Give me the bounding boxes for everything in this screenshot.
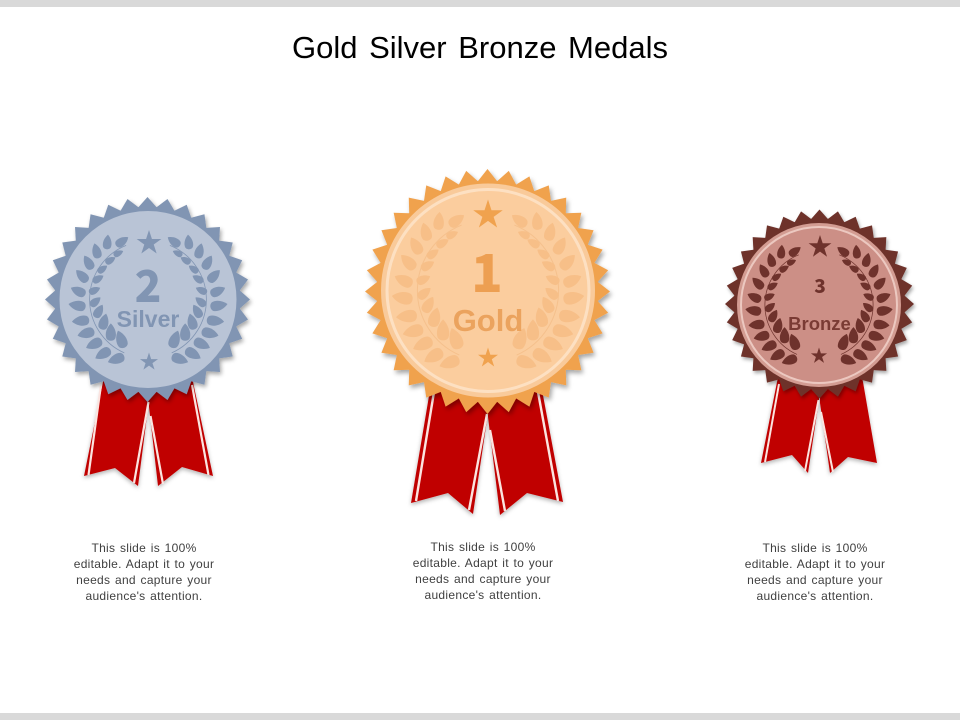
silver label: Silver xyxy=(117,306,179,332)
gold label: Gold xyxy=(453,303,523,338)
caption: bronze: audience's attention. xyxy=(756,589,874,603)
caption: silver: audience's attention. xyxy=(85,589,203,603)
silver bottom star xyxy=(140,352,158,370)
bronze number: 3 xyxy=(814,272,826,299)
caption: silver: editable. Adapt it to your xyxy=(74,557,214,571)
gold starburst xyxy=(365,169,610,414)
gold laurel wreath xyxy=(391,211,585,372)
caption: silver: This slide is 100% xyxy=(91,541,197,555)
silver top star xyxy=(137,230,161,254)
silver laurel wreath xyxy=(68,234,228,367)
bronze top star xyxy=(809,235,831,257)
medal: gold xyxy=(365,169,610,515)
bronze bottom star xyxy=(811,348,827,363)
bronze starburst xyxy=(725,210,914,398)
gold inner ring xyxy=(387,190,589,392)
medal: silver xyxy=(45,197,250,486)
caption: gold: editable. Adapt it to your xyxy=(413,556,553,570)
title: Gold Silver Bronze Medals xyxy=(292,30,668,65)
top grey bar xyxy=(0,0,960,7)
caption: bronze: needs and capture your xyxy=(747,573,883,587)
gold ribbon xyxy=(411,350,563,515)
bottom grey bar xyxy=(0,713,960,720)
medal: bronze xyxy=(725,210,914,473)
gold bottom star xyxy=(478,348,498,366)
bronze ribbon xyxy=(761,350,877,473)
caption: gold: This slide is 100% xyxy=(430,540,536,554)
silver starburst xyxy=(45,197,250,402)
bronze laurel wreath xyxy=(745,244,893,367)
caption: bronze: This slide is 100% xyxy=(762,541,868,555)
bronze label: Bronze xyxy=(788,313,851,334)
bronze disc xyxy=(737,223,901,387)
caption: gold: audience's attention. xyxy=(424,588,542,602)
caption: silver: needs and capture your xyxy=(76,573,212,587)
gold number: 1 xyxy=(471,232,503,307)
silver ribbon xyxy=(84,350,213,486)
silver number: 2 xyxy=(135,251,161,315)
gold top star xyxy=(473,200,503,228)
bronze inner ring xyxy=(741,227,897,383)
caption: bronze: editable. Adapt it to your xyxy=(745,557,885,571)
silver disc xyxy=(60,211,236,388)
caption: gold: needs and capture your xyxy=(415,572,551,586)
gold disc xyxy=(381,184,595,398)
